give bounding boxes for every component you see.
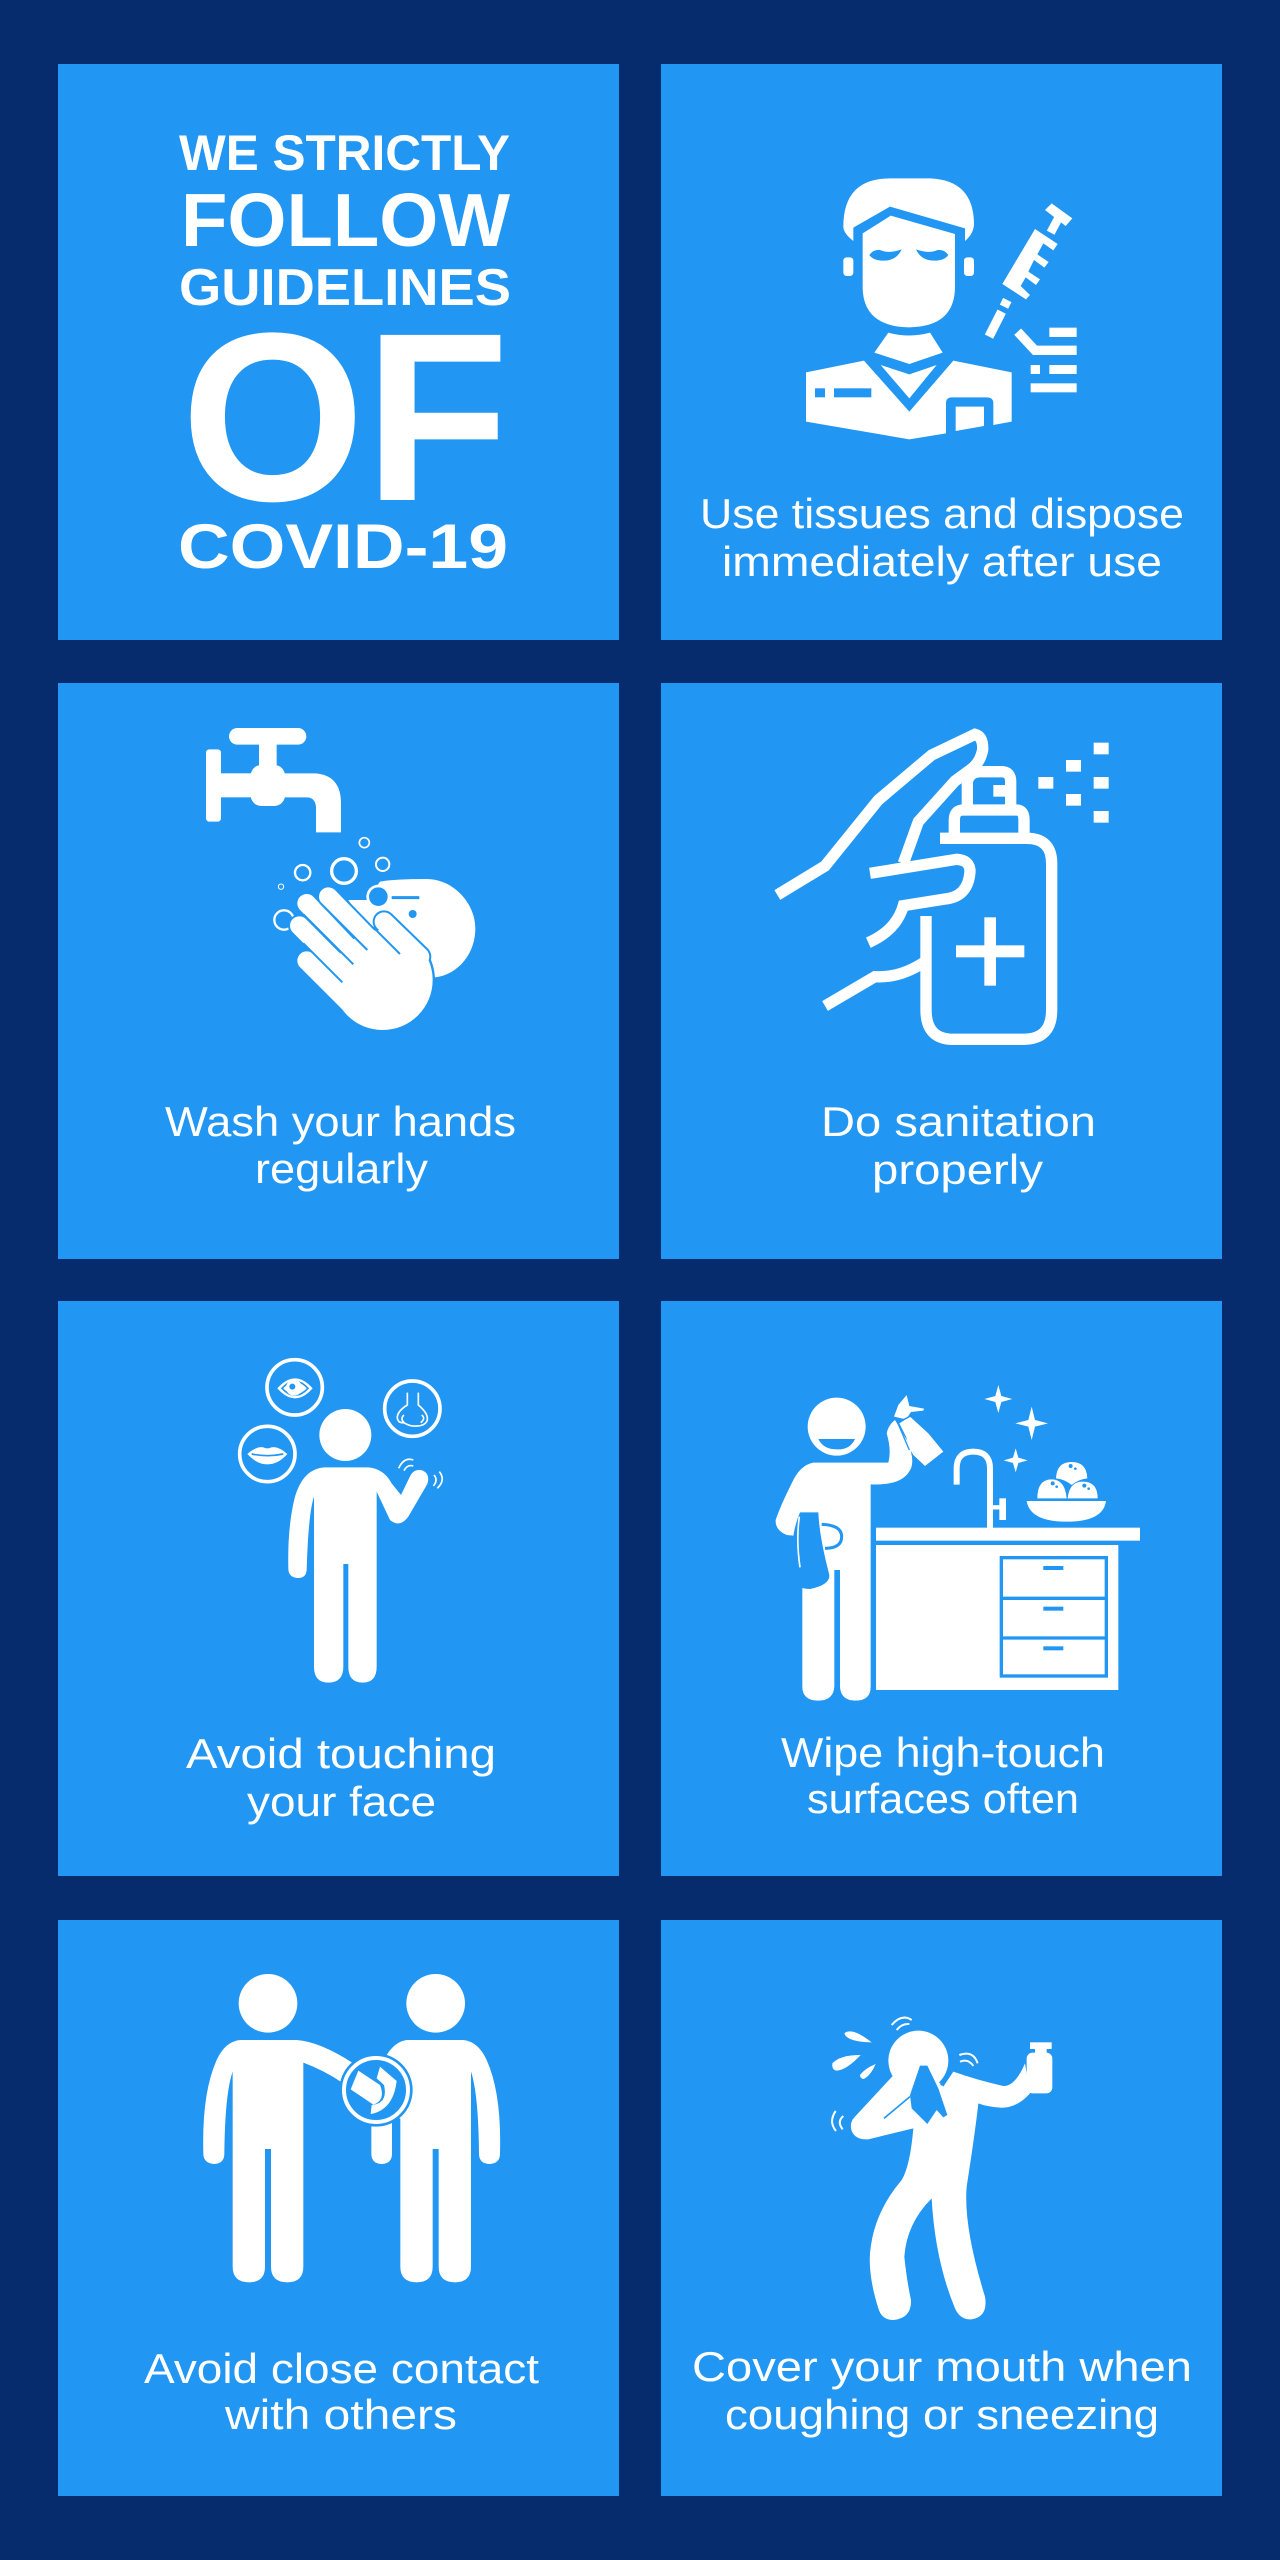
icon: person cleaning a kitchen counter (776, 1385, 1140, 1701)
caption: avoid close contact (144, 2345, 539, 2438)
caption: wash your hands: regularly (255, 1145, 428, 1192)
heading: we strictly follow guidelines of covid-19: WE STRICTLY (179, 125, 510, 181)
caption: cover your mouth when coughing or sneezing: coughing or sneezing (725, 2391, 1159, 2438)
caption: use tissues: immediately after use (722, 538, 1162, 585)
panel: avoid close contact (58, 1920, 619, 2496)
icon: person with eye, nose and mouth (240, 1360, 442, 1683)
heading: we strictly follow guidelines of covid-19: FOLLOW (181, 178, 510, 262)
caption: avoid close contact: with others (224, 2391, 457, 2438)
caption: cover your mouth when coughing or sneezing (692, 2343, 1192, 2438)
caption: do sanitation: Do sanitation (821, 1098, 1096, 1145)
caption: wipe high-touch surfaces often (781, 1729, 1105, 1822)
caption: wash your hands: Wash your hands (165, 1098, 516, 1145)
caption: wash your hands (165, 1098, 516, 1192)
icon: hand spraying sanitizer bottle (777, 734, 1109, 1039)
caption: avoid touching your face: Avoid touching (186, 1730, 496, 1777)
panel: wash hands (58, 683, 619, 1259)
heading: we strictly follow guidelines of covid-19 (178, 125, 511, 582)
panel: sanitation (661, 683, 1222, 1259)
caption: do sanitation: properly (872, 1146, 1043, 1193)
panel: use tissues (661, 64, 1222, 640)
caption: wipe high-touch surfaces often: surfaces often (807, 1775, 1079, 1822)
caption: wipe high-touch surfaces often: Wipe high-touch (781, 1729, 1105, 1776)
icon: two people shaking hands (203, 1974, 500, 2282)
heading: we strictly follow guidelines of covid-19: GUIDELINES (179, 259, 511, 317)
panel: title (58, 64, 619, 640)
caption: do sanitation (821, 1098, 1096, 1193)
panel: cover your mouth (661, 1920, 1222, 2496)
heading: we strictly follow guidelines of covid-19: COVID-19 (178, 512, 508, 582)
caption: use tissues: Use tissues and dispose (700, 490, 1184, 537)
panel: wipe surfaces (661, 1301, 1222, 1876)
caption: avoid touching your face: your face (247, 1778, 436, 1825)
caption: use tissues (700, 490, 1184, 585)
caption: cover your mouth when coughing or sneezing: Cover your mouth when (692, 2343, 1192, 2390)
heading: we strictly follow guidelines of covid-19: OF (181, 283, 509, 551)
icon: person sneezing into tissue (832, 2018, 1052, 2320)
caption: avoid touching your face (186, 1730, 496, 1825)
caption: avoid close contact: Avoid close contact (144, 2345, 539, 2392)
icon: doctor with syringe (806, 178, 1077, 439)
icon: tap and washing hands (206, 728, 475, 1030)
panel: avoid touching face (58, 1301, 619, 1876)
